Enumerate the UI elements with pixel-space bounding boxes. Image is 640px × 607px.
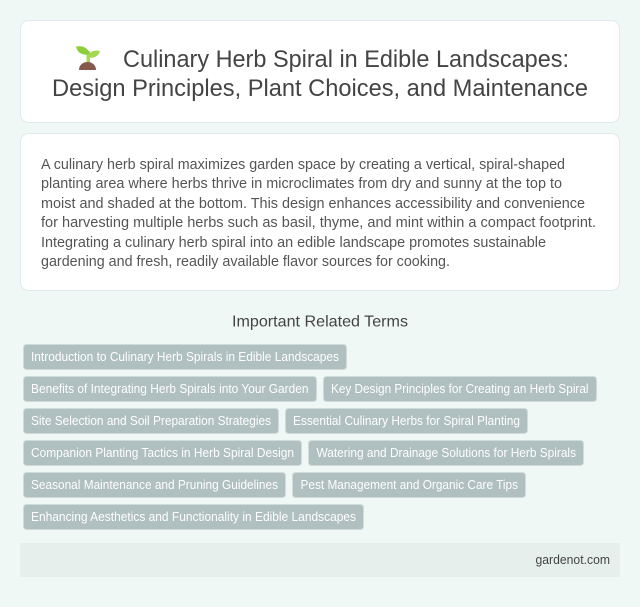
- tag: introduction: Introduction to Culinary Herb Spirals in Edible Landscapes: [31, 349, 339, 364]
- tag: essential herbs: Essential Culinary Herbs for Spiral Planting: [293, 413, 520, 428]
- tag: site selection: Site Selection and Soil Preparation Strategies: [31, 413, 271, 428]
- tag: introduction: [24, 344, 346, 370]
- tag: aesthetics: [24, 504, 364, 530]
- tag: watering: Watering and Drainage Solutions for Herb Spirals: [316, 445, 576, 460]
- tag: design principles: [324, 376, 596, 402]
- tag: benefits: Benefits of Integrating Herb Spirals into Your Garden: [31, 381, 308, 396]
- footer: gardenot.com: [536, 552, 610, 567]
- tag: essential herbs: [286, 408, 528, 434]
- tag: watering: [308, 440, 584, 466]
- title: [52, 46, 588, 102]
- tag: companion planting: [24, 440, 302, 466]
- panel: description: [20, 134, 620, 290]
- icon: sprout: [76, 46, 100, 70]
- tag: pest management: [292, 472, 526, 498]
- tag: seasonal maintenance: [24, 472, 286, 498]
- tag: seasonal maintenance: Seasonal Maintenance and Pruning Guidelines: [31, 477, 278, 492]
- tag: pest management: Pest Management and Organic Care Tips: [300, 477, 518, 492]
- tag: site selection: [24, 408, 278, 434]
- text block: description: [41, 156, 596, 270]
- panel: title card: [20, 20, 620, 122]
- text block: description: for harvesting multiple herbs such as basil, thyme, and mint within a compact footprint.: [41, 214, 596, 231]
- tag: benefits: [24, 376, 316, 402]
- tag: aesthetics: Enhancing Aesthetics and Functionality in Edible Landscapes: [31, 509, 356, 524]
- text block: description: A culinary herb spiral maximizes garden space by creating a vertical, spiral-shaped: [41, 156, 565, 173]
- tag: design principles: Key Design Principles for Creating an Herb Spiral: [331, 381, 589, 396]
- tag list: related terms: [24, 344, 596, 530]
- text block: description: gardening and fresh, readily available flavor sources for cooking.: [41, 253, 450, 270]
- text block: description: Integrating a culinary herb spiral into an edible landscape promotes sustainable: [41, 234, 546, 251]
- text block: description: moist and shaded at the bottom. This design enhances accessibility and convenience: [41, 195, 585, 212]
- title: Design Principles, Plant Choices, and Maintenance: [52, 75, 588, 102]
- tag: companion planting: Companion Planting Tactics in Herb Spiral Design: [31, 445, 294, 460]
- text block: description: planting area where herbs thrive in microclimates from dry and sunny at the top to: [41, 175, 562, 192]
- title: Culinary Herb Spiral in Edible Landscapes:: [123, 46, 569, 73]
- heading: related terms: Important Related Terms: [232, 314, 408, 330]
- footer: [20, 543, 620, 577]
